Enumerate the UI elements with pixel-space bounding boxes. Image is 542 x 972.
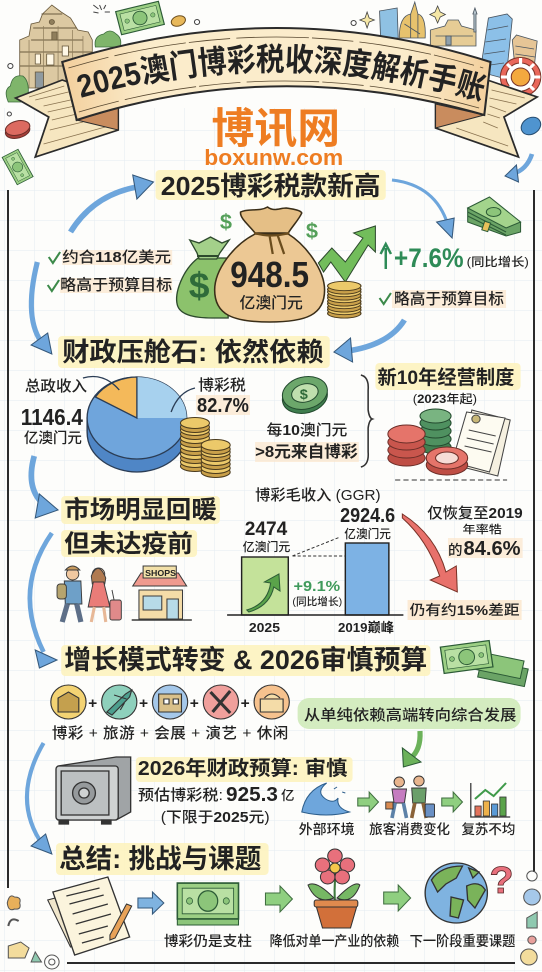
label: pillar: 博彩仍是支柱 <box>164 933 252 950</box>
icon row: integrated resort <box>51 685 289 719</box>
arrow: blue <box>138 892 164 914</box>
banner left tail <box>16 80 118 157</box>
icon: red chip stacks <box>388 425 468 475</box>
heading: market recovery: 但未达疫前 <box>64 530 193 558</box>
banner fold shadows <box>77 104 484 130</box>
logo: 博讯网: 博讯网 <box>212 106 340 153</box>
value: growth: (同比增长) <box>292 595 342 608</box>
value: growth: +9.1% <box>293 578 341 595</box>
icon: cash stack <box>177 883 239 925</box>
arrow: red down <box>402 514 457 592</box>
labels: external factors: 复苏不均 <box>461 821 515 837</box>
banner main ribbon <box>62 28 491 120</box>
label: total revenue: 总政收入 <box>25 378 87 395</box>
illustration: cash stack top right <box>468 197 521 236</box>
icon: convention <box>152 685 188 719</box>
arrow: to tax heading <box>71 175 153 232</box>
label: total revenue: 1146.4 <box>21 404 83 430</box>
icon: green chip stack <box>420 409 451 454</box>
labels: external factors: 外部环境 <box>299 821 355 837</box>
heading: 2025博彩税款新高: 2025博彩税款新高 <box>161 171 381 201</box>
heading: market recovery: 市场明显回暖 <box>64 496 217 524</box>
logo url: boxunw.com <box>204 145 343 170</box>
illustration: top cash note <box>116 1 164 35</box>
banner right tail <box>436 80 537 157</box>
budget estimate: 预估博彩税: <box>138 787 223 804</box>
notebook frame <box>8 190 534 963</box>
arrow: wave to travellers <box>358 792 379 812</box>
text: 15 percent gap: 仍有约 15%差距 <box>410 602 520 619</box>
illustration: large poker chip <box>500 58 541 96</box>
budget note: (下限于2025元) <box>161 809 270 826</box>
bar: 2019 peak <box>345 543 389 615</box>
bar chart: GGR <box>227 487 403 635</box>
axis labels <box>249 619 394 635</box>
arrow: to growth model <box>30 533 57 668</box>
icon: green chip <box>279 372 331 418</box>
icon: bar arrow <box>247 574 280 612</box>
text: per 10 patacas: >8元来自博彩 <box>255 442 358 461</box>
icon: contract paper <box>452 410 510 476</box>
note: yoy: (同比增长) <box>467 254 529 269</box>
list: left bullets: 略高于预算目标 <box>60 275 172 294</box>
icon: globe <box>425 863 487 923</box>
arrow: travellers to chart <box>442 792 463 812</box>
brace <box>361 375 372 467</box>
icon: green money bag <box>177 237 229 318</box>
icon: mini chart <box>471 783 510 817</box>
plus signs: + <box>241 695 250 712</box>
icon: question mark: ? <box>489 860 514 902</box>
corner doodles left <box>7 896 59 969</box>
illustration: small coin and sparkles <box>7 5 445 116</box>
plus signs: + <box>88 695 97 712</box>
connector lines <box>292 537 345 556</box>
label: total revenue: 亿澳门元 <box>24 430 82 447</box>
arrow: right down to fiscal <box>334 320 404 362</box>
icon: dollar signs: $ <box>306 219 318 243</box>
illustration: trees <box>6 31 121 102</box>
illustration: ruins of St Paul's <box>20 5 92 88</box>
icon: travelers <box>386 776 435 818</box>
icon: green money bag: $ <box>189 266 209 306</box>
coins beside pie <box>180 418 230 478</box>
text: per 10 patacas <box>255 422 359 462</box>
text: recovery ratio: 仅恢复至2019 <box>427 505 523 522</box>
arrow: to summary <box>27 743 52 854</box>
icon: coin stack <box>328 281 361 318</box>
icon: performance <box>203 685 239 719</box>
text: recovery ratio <box>427 505 523 560</box>
value: +7.6%: +7.6% <box>394 242 464 273</box>
arrow: green 1 <box>265 886 292 912</box>
heading: new 10-year regime: (2023年起) <box>413 391 477 406</box>
icon: main money bag <box>215 207 325 322</box>
plus signs: + <box>190 695 199 712</box>
section: tax record <box>48 207 529 322</box>
axis labels: 2025 <box>249 620 280 635</box>
icon: leisure <box>254 685 289 719</box>
illustration: side chips and cash <box>2 114 542 185</box>
label: gaming tax: 82.7% <box>197 395 249 417</box>
icon: wave <box>302 783 349 815</box>
text: 2026 budget <box>136 756 353 826</box>
arrow: from tax heading to growth <box>392 180 454 238</box>
label: next stage: 下一阶段重要课题 <box>410 932 515 950</box>
arrow: green down <box>402 731 421 767</box>
pie chart <box>83 376 195 472</box>
heading: summary: 总结: 挑战与课题 <box>59 843 261 874</box>
corner doodles right <box>521 871 540 965</box>
text: recovery ratio: 年率牿 <box>463 522 502 536</box>
labels: external factors <box>299 821 515 837</box>
icon: gaming <box>51 685 86 719</box>
bullet: above target: 略高于预算目标 <box>394 289 504 308</box>
text: recovery ratio: 的 <box>448 542 463 559</box>
budget heading: 2026年财政预算: 审慎 <box>138 756 347 780</box>
callout: green pill: 从单纯依赖高端转向综合发展 <box>304 706 516 724</box>
plus signs: + <box>139 695 148 712</box>
value: growth <box>292 578 342 608</box>
callout: green pill <box>298 698 521 729</box>
heading: new 10-year regime <box>375 363 521 406</box>
axis <box>227 614 403 616</box>
value: 2924.6 <box>340 505 395 541</box>
arrow: to market <box>31 456 58 518</box>
arrow: left down to fiscal <box>31 262 52 354</box>
labels: external factors: 旅客消费变化 <box>369 821 450 837</box>
icon row labels: 博彩 + 旅游 + 会展 + 演艺 + 休闲 <box>52 725 288 742</box>
icon: tourism <box>102 685 137 719</box>
title text: 2025澳门博彩税收深度解析手账 <box>77 43 487 102</box>
list: left bullets: 约合118亿美元 <box>62 248 171 266</box>
text: per 10 patacas: 每10澳门元 <box>267 422 347 439</box>
heading: new 10-year regime: 新10年经营制度 <box>377 366 514 389</box>
value: 2474: 亿澳门元 <box>243 539 290 554</box>
value: 2924.6: 亿澳门元 <box>344 526 391 541</box>
icon: safe <box>56 757 131 824</box>
section: fiscal revenue <box>21 363 521 478</box>
value: 948.5: 948.5 <box>230 255 309 295</box>
heading: growth model: 增长模式转变 & 2026审慎预算 <box>64 644 427 675</box>
icon: growth arrow <box>318 226 375 282</box>
budget estimate <box>138 784 294 806</box>
icon: green chip: $ <box>300 387 308 403</box>
label: gaming tax <box>196 377 250 417</box>
budget estimate: 925.3 <box>226 784 278 806</box>
budget estimate: 亿 <box>281 788 294 803</box>
banner inner lines <box>68 37 483 112</box>
icon: flower pot <box>308 849 360 928</box>
chart title: 博彩毛收入 (GGR) <box>255 487 381 504</box>
illustration: shop: SHOPS <box>145 568 176 578</box>
banner hatch lines <box>29 86 525 146</box>
icon: notes and pencil <box>48 877 132 955</box>
value: 2924.6: 2924.6 <box>340 505 395 527</box>
text: recovery ratio: 84.6% <box>464 538 521 560</box>
plus signs <box>88 695 250 712</box>
title banner <box>14 27 540 158</box>
axis labels: 2019巅峰 <box>338 619 394 635</box>
bar: 2025 <box>242 557 288 615</box>
unit: 亿澳门元: 亿澳门元 <box>240 293 303 312</box>
dashed separator <box>395 479 507 481</box>
icon: dollar signs: $ <box>220 210 232 234</box>
heading: market recovery <box>61 496 220 558</box>
illustration: travellers <box>57 566 121 622</box>
label: reduce dependence: 降低对单一产业的依赖 <box>270 932 399 950</box>
illustration: cash pile <box>440 641 528 687</box>
heading: fiscal ballast: 财政压舱石: 依然依赖 <box>62 337 324 367</box>
icon: dollar signs <box>220 210 318 243</box>
arrow: green 2 <box>384 885 411 911</box>
arrow: top right small <box>505 154 532 182</box>
list: left bullets <box>48 248 172 294</box>
illustration: shop <box>132 566 192 620</box>
icon: up arrow <box>381 244 391 269</box>
value: 2474: 2474 <box>245 518 287 540</box>
label: gaming tax: 博彩税 <box>198 377 246 394</box>
illustration: Macau skyline <box>380 2 537 79</box>
value: 2474 <box>243 518 290 554</box>
label: total revenue <box>21 378 87 447</box>
